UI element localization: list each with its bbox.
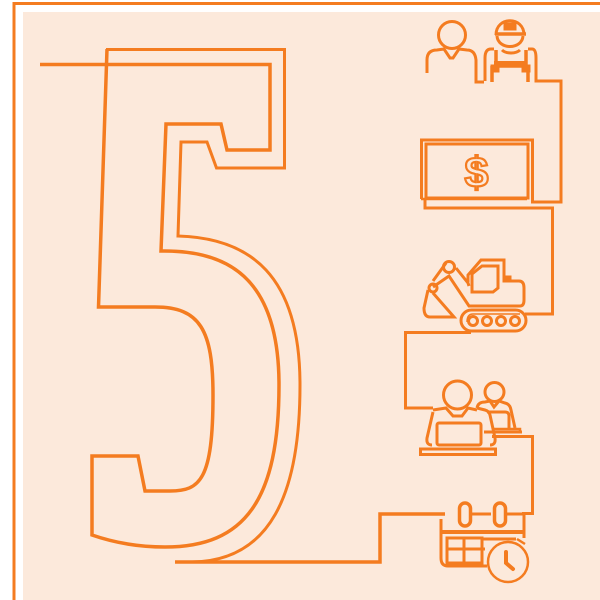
connector line from excavator to laptop team: [406, 332, 471, 408]
icon: construction worker: [485, 21, 561, 82]
icon: excavator: [424, 260, 526, 331]
large numeral five: outer outline: [106, 50, 300, 562]
icon: team at laptops: [420, 381, 522, 454]
connector line from banknote to excavator: [425, 199, 552, 314]
connector line from people to banknote: [422, 81, 561, 202]
icon: banknote with dollar sign: [421, 144, 528, 199]
connector line from laptop team to calendar: [492, 436, 532, 514]
icon: banknote with dollar sign: $: [465, 149, 489, 197]
large numeral five: inner outline: [40, 49, 279, 547]
connector line to bottom: [175, 514, 445, 562]
icon: manager: [427, 22, 484, 82]
icon: calendar with clock: [441, 503, 528, 582]
